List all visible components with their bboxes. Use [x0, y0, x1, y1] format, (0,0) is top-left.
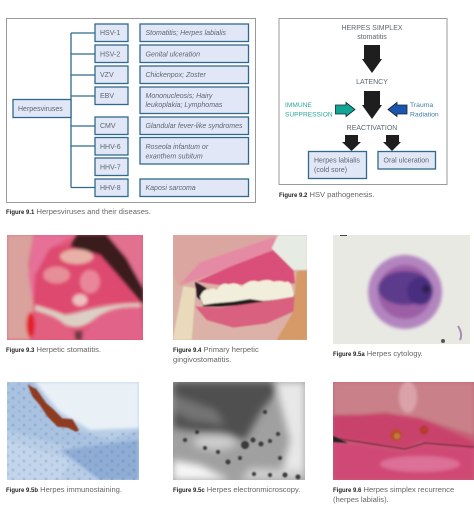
brown stain [29, 386, 78, 431]
box: herpes labialis [308, 152, 366, 178]
virus: HSV-1: HSV-1 [100, 30, 120, 37]
caption: Figure 9.4: gingivostomatitis. [173, 355, 231, 364]
virus: HSV-1 [95, 24, 128, 42]
panel: Figure 9.2 HSV pathogenesis [279, 18, 447, 184]
disease: genital ulceration [140, 45, 248, 62]
caption: Figure 9.6: Figure 9.6 Herpes simplex recurrence [333, 485, 454, 494]
virus: HHV-6 [95, 138, 128, 155]
caption: Figure 9.5c: Figure 9.5c Herpes electronmicroscopy. [173, 485, 300, 494]
connector tree [71, 33, 95, 188]
arrow: to oral ulceration [383, 135, 401, 151]
virus: CMV: CMV [100, 123, 116, 130]
box: herpes labialis: (cold sore) [314, 167, 347, 174]
arrow: immune suppression [336, 102, 355, 116]
caption: Figure 9.1: Figure 9.1 Herpesviruses and their diseases. [6, 207, 151, 216]
label: herpes simplex stomatitis [341, 25, 403, 41]
disease: roseola: Roseola infantum or [146, 144, 209, 151]
disease: Kaposi sarcoma: Kaposi sarcoma [146, 185, 196, 192]
virus: HHV-8: HHV-8 [100, 185, 121, 192]
panel: Figure 9.1 herpesviruses chart [6, 18, 256, 202]
disease: glandular fever: Glandular fever-like syndromes [146, 123, 243, 130]
arrow: latency to reactivation [362, 91, 382, 119]
disease: mononucleosis: Mononucleosis; Hairy [146, 93, 213, 100]
label: immune suppression: SUPPRESSION [285, 112, 333, 118]
disease: roseola [140, 138, 248, 164]
label: herpes simplex stomatitis: stomatitis [357, 34, 387, 41]
photo: Figure 9.5b herpes immunostaining [7, 382, 139, 480]
arrow: to herpes labialis [342, 135, 361, 151]
label: trauma radiation [410, 102, 439, 118]
caption: Figure 9.3: Figure 9.3 Herpetic stomatitis. [6, 345, 101, 354]
virus: HHV-6: HHV-6 [100, 144, 121, 151]
virus: HHV-7: HHV-7 [100, 164, 121, 172]
arrow: trauma radiation [388, 102, 407, 116]
label: latency: LATENCY [356, 79, 388, 86]
virus: VZV [95, 66, 128, 84]
root box: Herpesviruses: Herpesviruses [18, 106, 63, 113]
disease: mononucleosis [140, 87, 248, 114]
lesions [390, 426, 428, 441]
box: oral ulceration: Oral ulceration [384, 158, 429, 164]
virus: CMV [95, 117, 128, 134]
disease: chickenpox [140, 66, 248, 84]
caption: Figure 9.6: (herpes labialis). [333, 495, 389, 504]
disease: stomatitis [140, 24, 248, 42]
virus: VZV: VZV [100, 72, 114, 79]
virus: HHV-8 [95, 179, 128, 196]
disease: glandular fever [140, 117, 248, 134]
photo: Figure 9.5a herpes cytology [333, 234, 470, 344]
label: immune suppression [285, 102, 333, 118]
photo: Figure 9.3 herpetic stomatitis [7, 234, 143, 340]
virus: EBV [95, 87, 128, 104]
root box: Herpesviruses [13, 100, 71, 118]
virus: EBV: EBV [100, 93, 114, 100]
caption: Figure 9.5a: Figure 9.5a Herpes cytology. [333, 349, 423, 358]
caption: Figure 9.5b: Figure 9.5b Herpes immunostaining. [6, 485, 122, 494]
disease: roseola: exanthem subitum [146, 154, 203, 160]
caption: Figure 9.4: Figure 9.4 Primary herpetic [173, 345, 259, 354]
caption: Figure 9.6 [333, 485, 454, 504]
virus: HHV-7 [95, 158, 128, 176]
caption: Figure 9.4 [173, 345, 259, 364]
label: trauma radiation: Trauma [410, 102, 433, 109]
label: immune suppression: IMMUNE [285, 102, 312, 109]
arrow: stomatitis to latency [362, 45, 382, 73]
disease: mononucleosis: leukoplakia; Lymphomas [146, 102, 223, 109]
disease: chickenpox: Chickenpox; Zoster [146, 72, 206, 79]
photo: Figure 9.6 herpes simplex recurrence [333, 381, 474, 480]
disease: stomatitis: Stomatitis; Herpes labialis [146, 30, 227, 37]
disease: Kaposi sarcoma [140, 179, 248, 196]
label: trauma radiation: Radiation [410, 112, 439, 118]
label: herpes simplex stomatitis: HERPES SIMPLEX [341, 25, 403, 32]
caption: Figure 9.2: Figure 9.2 HSV pathogenesis. [279, 190, 374, 199]
box: oral ulceration [378, 152, 436, 169]
virus: HSV-2: HSV-2 [100, 52, 120, 58]
virus: HSV-2 [95, 45, 128, 62]
photo: Figure 9.5c herpes electronmicroscopy [173, 382, 305, 480]
photo: Figure 9.4 primary herpetic gingivostomatitis [173, 234, 307, 340]
disease: genital ulceration: Genital ulceration [146, 52, 200, 58]
box: herpes labialis: Herpes labialis [314, 158, 360, 164]
label: reactivation: REACTIVATION [347, 125, 397, 132]
